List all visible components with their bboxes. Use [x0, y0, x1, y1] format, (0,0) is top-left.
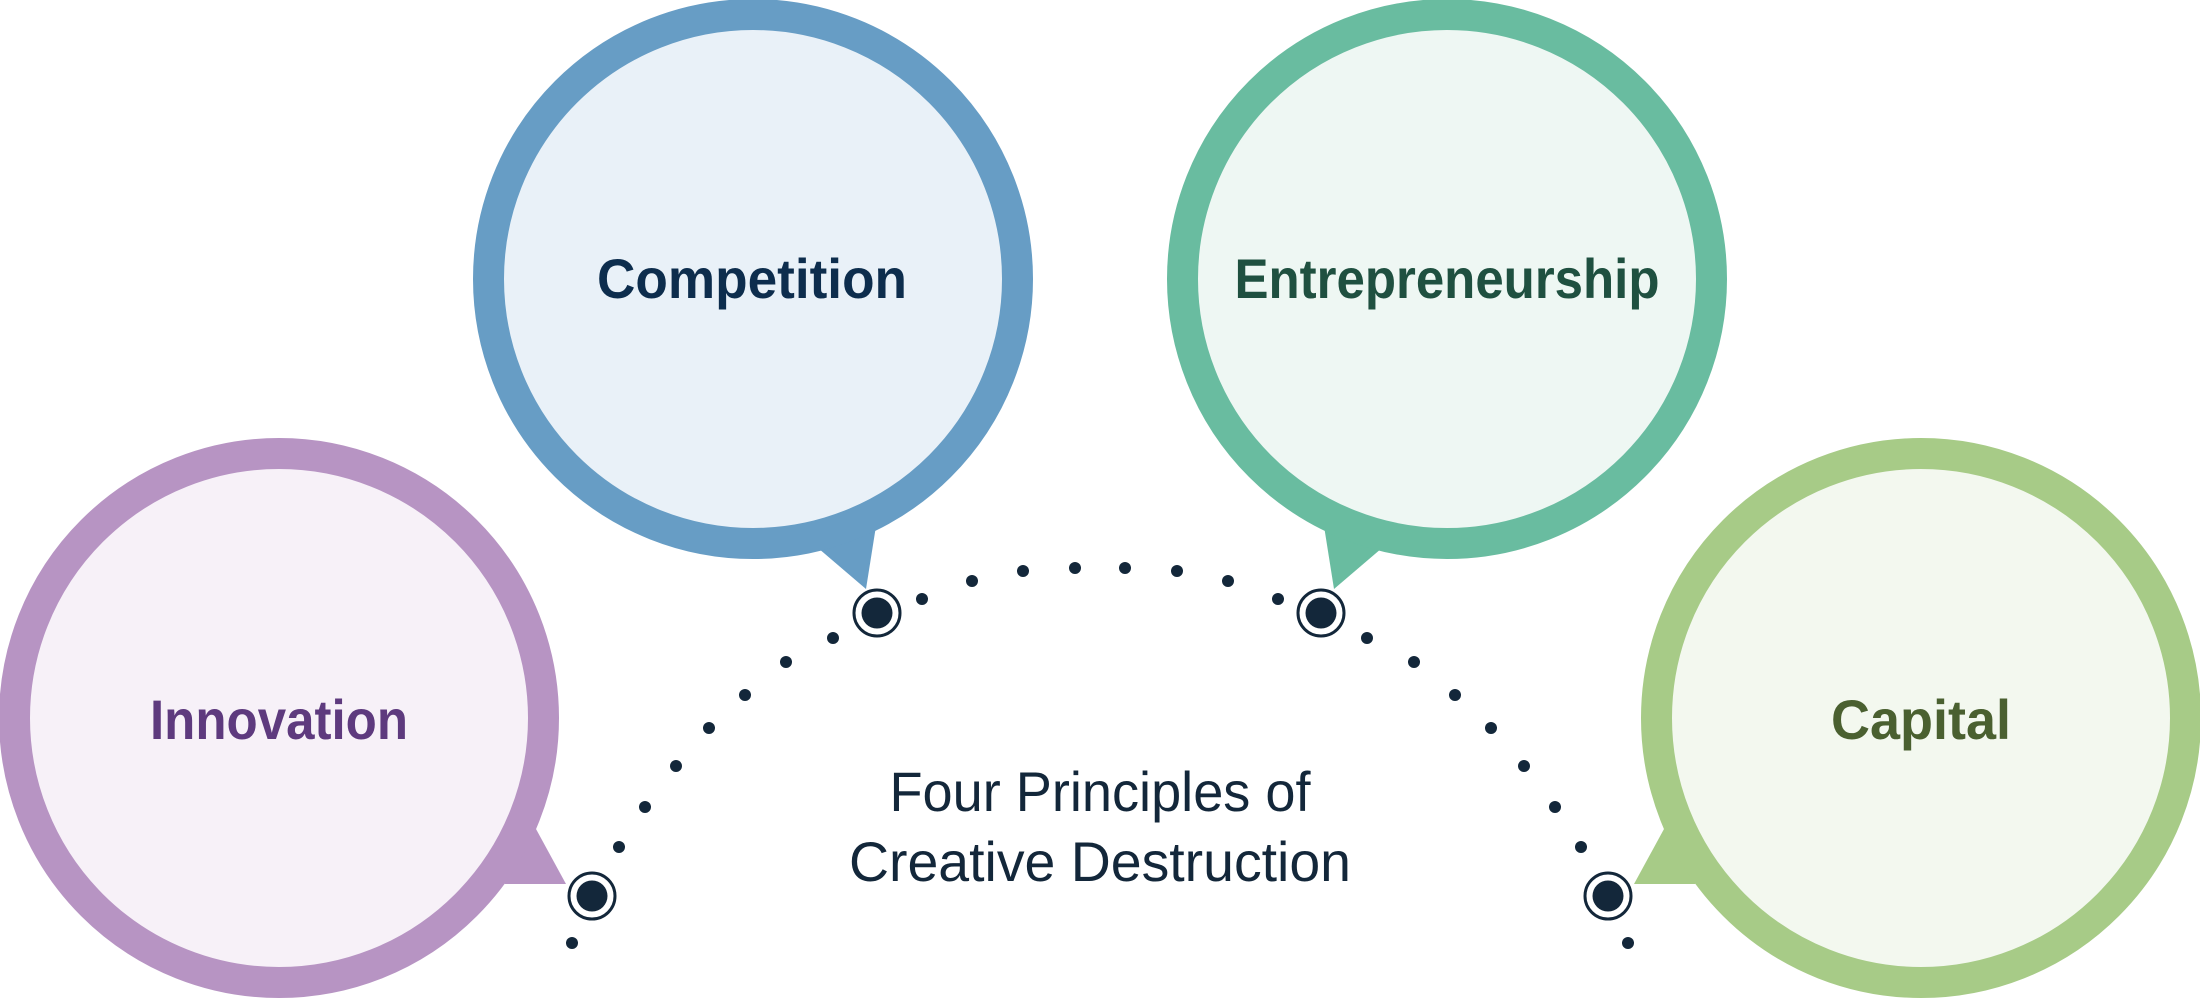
panel: Entrepreneurship	[1182, 14, 1712, 589]
label: Competition: Competition	[597, 247, 907, 310]
label: Capital: Capital	[1831, 688, 2011, 751]
title: Four Principles of	[890, 760, 1311, 823]
marker: Capital node	[1585, 873, 1631, 919]
marker: Competition node	[854, 590, 900, 636]
dotted arc connector	[566, 562, 1634, 949]
marker: Entrepreneurship node	[1298, 590, 1344, 636]
title: Creative Destruction	[849, 830, 1351, 893]
label: Innovation: Innovation	[150, 688, 408, 751]
panel: Innovation	[14, 454, 566, 982]
marker: Innovation node	[569, 873, 615, 919]
title	[849, 760, 1351, 893]
panel: Capital	[1634, 454, 2186, 982]
label: Entrepreneurship: Entrepreneurship	[1234, 247, 1660, 310]
panel: Competition	[488, 14, 1018, 589]
